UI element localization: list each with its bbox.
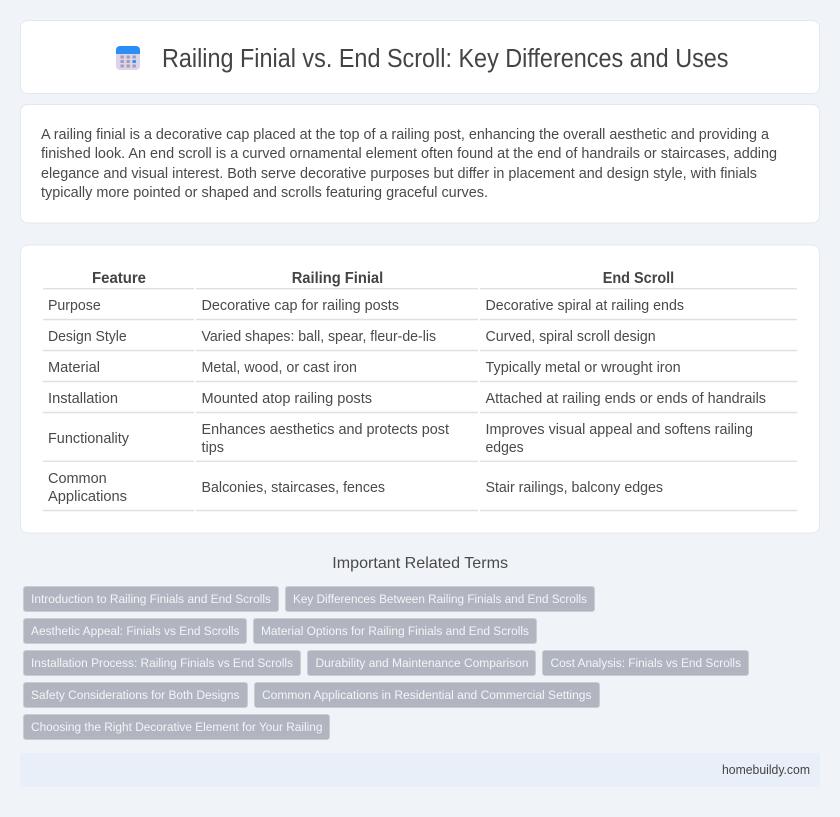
table row: installation: Mounted atop railing posts bbox=[202, 391, 372, 407]
table row: functionality bbox=[43, 422, 797, 461]
tag: Introduction to Railing Finials and End Scrolls bbox=[31, 592, 271, 606]
text block: description: elegance and visual interest. Both serve decorative purposes but differ in placement and design style, with finials bbox=[41, 166, 757, 182]
tag: Cost Analysis: Finials vs End Scrolls bbox=[550, 656, 741, 670]
footer source text: homebuildy.com bbox=[722, 762, 810, 777]
tag bbox=[254, 682, 600, 708]
text block: description: A railing finial is a decorative cap placed at the top of a railing post, enhancing the overall aesthetic and providing a bbox=[41, 127, 769, 143]
table row: common applications bbox=[43, 471, 797, 510]
table row: design style: Design Style bbox=[48, 329, 127, 345]
tag bbox=[24, 618, 246, 644]
table header row: End Scroll bbox=[603, 270, 674, 287]
table row: material: Metal, wood, or cast iron bbox=[202, 360, 357, 376]
tag: Material Options for Railing Finials and End Scrolls bbox=[261, 624, 529, 638]
panel: header bbox=[20, 20, 820, 94]
table row: common applications: Applications bbox=[48, 489, 127, 505]
text block: description: typically more pointed or shaped and scrolls featuring graceful curves. bbox=[41, 185, 488, 201]
table row: functionality: Enhances aesthetics and protects post bbox=[202, 422, 449, 438]
table row: material bbox=[43, 360, 797, 382]
table row: installation: Attached at railing ends or ends of handrails bbox=[486, 391, 766, 407]
panel: description bbox=[20, 104, 820, 223]
tag: Installation Process: Railing Finials vs End Scrolls bbox=[31, 656, 293, 670]
table row: design style bbox=[43, 329, 797, 350]
tag: Common Applications in Residential and Commercial Settings bbox=[262, 688, 592, 702]
title: Railing Finial vs. End Scroll: Key Differences and Uses bbox=[162, 45, 728, 73]
table row: purpose: Decorative spiral at railing ends bbox=[486, 298, 684, 314]
tag bbox=[542, 650, 748, 676]
heading: related terms: Important Related Terms bbox=[332, 555, 508, 572]
table header row bbox=[43, 270, 797, 289]
tag: Key Differences Between Railing Finials and End Scrolls bbox=[293, 592, 587, 606]
tag: Choosing the Right Decorative Element for Your Railing bbox=[31, 720, 322, 734]
table row: common applications: Stair railings, balcony edges bbox=[486, 480, 663, 496]
table row: functionality: tips bbox=[202, 440, 224, 456]
tag: Safety Considerations for Both Designs bbox=[31, 688, 240, 702]
table row: material: Typically metal or wrought iron bbox=[486, 360, 681, 376]
table row: purpose: Purpose bbox=[48, 298, 101, 314]
related term tags bbox=[24, 586, 748, 740]
table header row: Feature bbox=[92, 270, 146, 287]
table row: design style: Varied shapes: ball, spear, fleur-de-lis bbox=[202, 329, 436, 345]
tag: Aesthetic Appeal: Finials vs End Scrolls bbox=[31, 624, 240, 638]
footer bbox=[20, 753, 820, 787]
table header row: Railing Finial bbox=[292, 270, 383, 287]
panel: comparison table bbox=[20, 245, 820, 533]
text block: description bbox=[41, 127, 777, 201]
table row: purpose bbox=[43, 298, 797, 320]
tag bbox=[308, 650, 536, 676]
tag bbox=[24, 714, 330, 740]
table row: common applications: Balconies, staircases, fences bbox=[202, 480, 385, 496]
table row: functionality: Improves visual appeal and softens railing bbox=[486, 422, 753, 438]
table row: common applications: Common bbox=[48, 471, 107, 487]
table row: material: Material bbox=[48, 360, 100, 376]
tag bbox=[24, 650, 300, 676]
text block: description: finished look. An end scroll is a curved ornamental element often found at the end of handrails or staircases, adding bbox=[41, 146, 777, 162]
tag: Durability and Maintenance Comparison bbox=[316, 656, 528, 670]
table row: purpose: Decorative cap for railing posts bbox=[202, 298, 399, 314]
tag bbox=[24, 586, 278, 612]
table row: functionality: Functionality bbox=[48, 431, 130, 447]
table row: functionality: edges bbox=[486, 440, 524, 456]
tag bbox=[254, 618, 536, 644]
tag bbox=[24, 682, 248, 708]
table row: installation: Installation bbox=[48, 391, 118, 407]
table row: design style: Curved, spiral scroll design bbox=[486, 329, 656, 345]
icon: calendar bbox=[116, 46, 140, 70]
table row: installation bbox=[43, 391, 797, 412]
tag bbox=[286, 586, 594, 612]
